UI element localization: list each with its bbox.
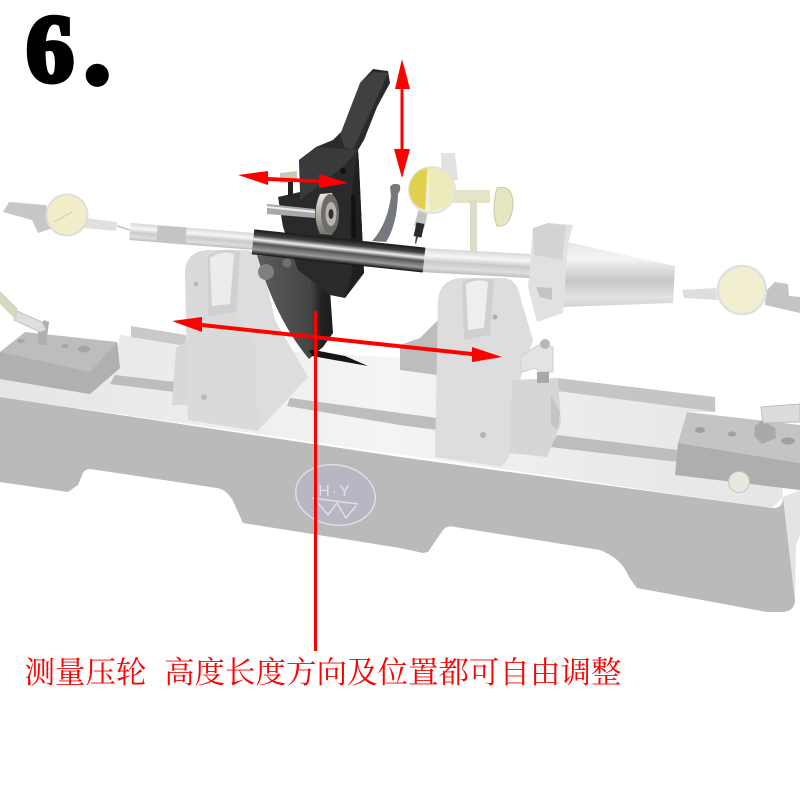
caption text: 测量压轮 bbox=[24, 656, 146, 690]
right knob bbox=[728, 472, 750, 492]
title number bbox=[26, 0, 114, 113]
right dial indicator bbox=[682, 266, 800, 314]
set screw bbox=[280, 171, 297, 183]
guide pin bbox=[267, 204, 315, 218]
bed front face bbox=[0, 397, 795, 612]
tapered tool holder bbox=[528, 223, 675, 322]
left dial indicator bbox=[3, 194, 130, 236]
right indicator block bbox=[675, 404, 800, 492]
shaft bbox=[129, 223, 531, 278]
upper arm and wheel assembly bbox=[267, 69, 390, 298]
middle dial indicator bbox=[409, 167, 455, 244]
caption text: 高度长度方向及位置都可自由调整 bbox=[164, 656, 622, 690]
logo badge HY bbox=[291, 459, 380, 531]
faded center dial stand bbox=[441, 153, 513, 252]
rear rail right bbox=[557, 378, 715, 412]
red arrow: vertical adjustment bbox=[394, 59, 410, 178]
right pedestal bearing bbox=[462, 278, 494, 340]
ball bearing wheel bbox=[316, 193, 338, 235]
rear rail left bbox=[131, 326, 186, 346]
left pedestal bearing bbox=[208, 250, 240, 316]
machine bed base bbox=[0, 326, 800, 612]
gray hook bbox=[372, 184, 400, 242]
left pedestal bbox=[172, 250, 308, 431]
right bed end shade bbox=[783, 490, 800, 600]
knurled collar bbox=[156, 225, 187, 244]
red arrow: horizontal adjustment bbox=[238, 171, 348, 188]
left indicator block bbox=[0, 291, 120, 394]
clamp lever bbox=[520, 345, 553, 372]
red arrow: length adjustment bbox=[172, 317, 502, 362]
guide slots bbox=[110, 375, 678, 462]
bed top surface bbox=[0, 335, 783, 508]
faded shaft left bbox=[129, 223, 255, 250]
right pedestal bbox=[400, 278, 561, 467]
faded shaft right bbox=[421, 248, 531, 278]
logo badge HY: H·Y bbox=[318, 483, 352, 500]
right magnet post bbox=[754, 420, 776, 444]
red leader line bbox=[314, 311, 317, 651]
dark measuring arm bbox=[257, 255, 368, 366]
black shaft section bbox=[252, 229, 425, 273]
left magnet post bbox=[38, 320, 49, 345]
dark rear slide block bbox=[400, 320, 438, 375]
